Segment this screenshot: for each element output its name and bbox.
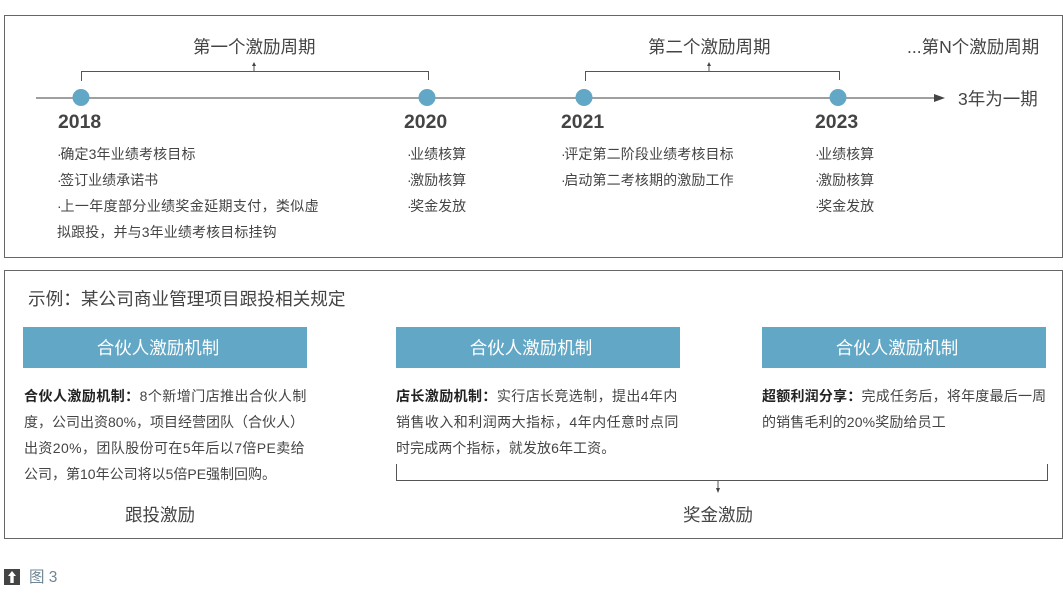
heading: Nth cycle: ...第N个激励周期 (907, 37, 1039, 57)
label: three years per period: 3年为一期 (958, 89, 1038, 109)
header bar 1: 合伙人激励机制 (97, 338, 219, 358)
panel: example (4, 270, 1063, 539)
text: 2023 items: ·业绩核算 (815, 146, 874, 162)
text: 2020 items: ·奖金发放 (407, 198, 466, 214)
axis arrow (36, 94, 945, 102)
label: bonus incentive: 奖金激励 (683, 505, 753, 525)
text: partner incentive: 度，公司出资80%，项目经营团队（合伙人） (24, 414, 304, 430)
timeline chart with axis, brackets and dots (36, 62, 945, 106)
text: store manager incentive: 时完成两个指标，就发放6年工资。 (396, 440, 615, 456)
text: excess profit sharing: 超额利润分享：完成任务后，将年度最后一周 (762, 388, 1046, 404)
text: 2018 items (57, 146, 319, 240)
year 2023: 2023 (815, 111, 858, 133)
text: partner incentive (24, 388, 307, 482)
text: 2018 items: ·签订业绩承诺书 (57, 172, 158, 188)
text: store manager incentive: 店长激励机制：实行店长竞选制，提出4年内 (396, 388, 678, 404)
header bar 1 (23, 327, 307, 368)
text: 2023 items: ·激励核算 (815, 172, 874, 188)
text: partner incentive: 出资20%，团队股份可在5年后以7倍PE卖给 (24, 440, 305, 456)
year 2018: 2018 (58, 111, 101, 133)
text: store manager incentive (396, 388, 679, 456)
text: store manager incentive: 销售收入和利润两大指标，4年内任意时点同 (396, 414, 679, 430)
text: 2023 items: ·奖金发放 (815, 198, 874, 214)
heading: first cycle: 第一个激励周期 (193, 37, 316, 57)
year 2021: 2021 (561, 111, 604, 133)
text: 2023 items (815, 146, 874, 214)
figure caption: 图 3 (29, 569, 57, 586)
dot 2018 (72, 89, 90, 106)
header bar 3 (762, 327, 1046, 368)
bracket: first cycle (82, 62, 428, 81)
dot 2021 (576, 89, 592, 106)
text: 2018 items: ·确定3年业绩考核目标 (57, 146, 196, 162)
text: 2020 items: ·业绩核算 (407, 146, 466, 162)
text: partner incentive: 合伙人激励机制：8个新增门店推出合伙人制 (24, 388, 307, 404)
bracket: bonus group (396, 464, 1048, 493)
dot 2020 (418, 89, 436, 106)
text: excess profit sharing: 的销售毛利的20%奖励给员工 (762, 414, 946, 430)
panel: timeline (4, 15, 1063, 258)
bracket: second cycle (586, 62, 840, 81)
text: 2018 items: 拟跟投，并与3年业绩考核目标挂钩 (57, 224, 277, 240)
heading: second cycle: 第二个激励周期 (648, 37, 770, 57)
header bar 3: 合伙人激励机制 (836, 338, 958, 358)
text: partner incentive: 公司，第10年公司将以5倍PE强制回购。 (24, 466, 276, 482)
header bar 2: 合伙人激励机制 (470, 338, 592, 358)
text: 2020 items: ·激励核算 (407, 172, 466, 188)
text: 2020 items (407, 146, 466, 214)
label: co-investment incentive: 跟投激励 (125, 505, 195, 525)
text: 2021 items (561, 146, 734, 188)
example title: 示例：某公司商业管理项目跟投相关规定 (28, 289, 346, 309)
year 2020: 2020 (404, 111, 447, 133)
text: 2018 items: ·上一年度部分业绩奖金延期支付，类似虚 (57, 198, 319, 214)
icon: up arrow (4, 569, 20, 585)
text: 2021 items: ·评定第二阶段业绩考核目标 (561, 146, 734, 162)
text: excess profit sharing (762, 388, 1046, 430)
header bar 2 (396, 327, 680, 368)
dot 2023 (830, 89, 846, 106)
text: 2021 items: ·启动第二考核期的激励工作 (561, 172, 734, 188)
